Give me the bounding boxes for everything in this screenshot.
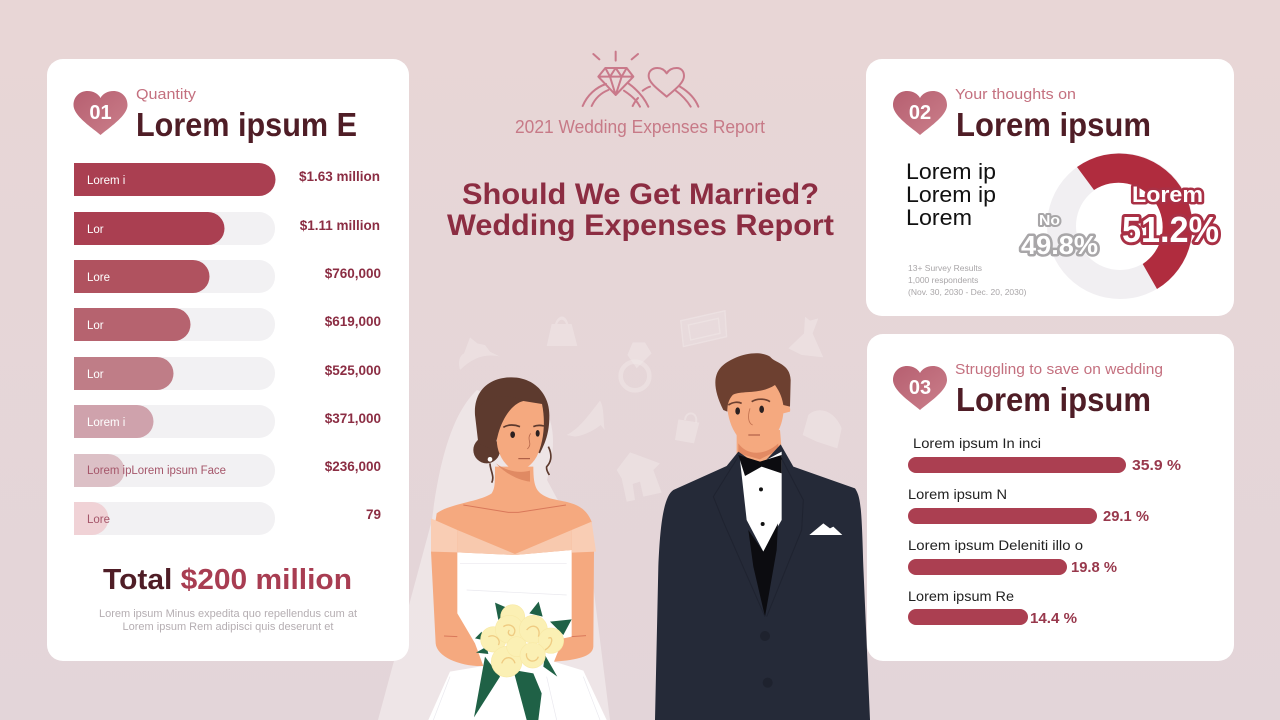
icon: heart 01 — [74, 91, 128, 135]
icon: heart 03 — [893, 366, 947, 410]
icon: dress — [788, 317, 823, 357]
survey note: 1,000 respondents — [908, 275, 978, 285]
icon: sofa — [803, 410, 842, 448]
horizontal bar chart: 14.4 % — [1030, 610, 1077, 627]
panel: your thoughts — [866, 59, 1234, 316]
groom suit — [655, 444, 870, 720]
subheading: quantity: Quantity — [136, 86, 197, 103]
bar chart: expense items: Lorem i — [87, 175, 125, 187]
bride head — [473, 377, 551, 483]
icon: high heel — [567, 401, 605, 437]
horizontal bar chart: Lorem ipsum Deleniti illo o — [908, 537, 1083, 553]
bar chart: expense items: $619,000 — [325, 314, 381, 329]
icon: handbag — [547, 317, 577, 346]
icon: heart 02 — [893, 91, 947, 135]
bride veil — [378, 390, 610, 720]
horizontal bar chart: Lorem ipsum N — [908, 486, 1007, 502]
illustration: bride — [378, 377, 610, 720]
icon: diamond ring and heart ring logo — [583, 52, 698, 107]
donut chart: 49.8% — [1021, 230, 1098, 260]
horizontal bar chart: Lorem ipsum In inci — [913, 435, 1041, 451]
footnote text: Lorem ipsum Minus expedita quo repellendus cum at — [99, 608, 357, 620]
icon: heart 03: 03 — [909, 377, 931, 399]
subheading: your thoughts on: Your thoughts on — [955, 86, 1076, 103]
donut chart: No — [1039, 212, 1060, 229]
heading: lorem ipsum: Lorem ipsum — [956, 106, 1151, 143]
footnote text — [99, 608, 357, 633]
icon: heart 01: 01 — [89, 102, 112, 124]
bar chart: expense items — [74, 163, 381, 535]
bar chart: expense items: Lore — [87, 272, 110, 284]
bar chart: expense items: Lorem i — [87, 417, 125, 429]
panel: quantity expenses — [47, 59, 409, 661]
icon: money bills — [681, 311, 727, 347]
bouquet — [474, 602, 572, 720]
survey note — [908, 263, 1027, 297]
faded wedding icons — [459, 311, 842, 502]
horizontal bar chart: 19.8 % — [1071, 559, 1117, 576]
footnote text: Lorem ipsum Rem adipisci quis deserunt et — [123, 621, 333, 633]
bar chart: expense items: Lor — [87, 320, 104, 332]
horizontal bar chart: 35.9 % — [1132, 457, 1181, 474]
title: Should We Get Married? — [462, 178, 819, 211]
bar chart: expense items: $760,000 — [325, 266, 381, 281]
bride body and dress — [428, 467, 607, 720]
bar chart: expense items: $371,000 — [325, 411, 381, 426]
donut chart — [1021, 153, 1219, 289]
bar chart: expense items: Lor — [87, 369, 104, 381]
bar chart: expense items: 79 — [366, 507, 381, 522]
horizontal bar chart — [908, 435, 1181, 627]
donut chart: Lorem — [1132, 182, 1203, 207]
icon: lock — [675, 413, 699, 443]
icon: diamond ring — [621, 342, 652, 390]
total figure: Total $200 million — [103, 564, 352, 596]
question text: Lorem ip — [906, 159, 996, 184]
icon: tiara — [459, 337, 500, 370]
horizontal bar chart: 29.1 % — [1103, 508, 1149, 525]
heading: lorem ipsum: Lorem ipsum — [956, 381, 1151, 418]
survey note: (Nov. 30, 2030 - Dec. 20, 2030) — [908, 287, 1027, 297]
report label: 2021 Wedding Expenses Report — [515, 117, 765, 137]
panel: struggling to save — [867, 334, 1234, 661]
bar chart: expense items: $1.63 million — [299, 169, 380, 184]
title — [447, 178, 834, 242]
heading: lorem ipsum e: Lorem ipsum E — [136, 106, 357, 143]
groom neck and face — [727, 377, 790, 463]
illustration: groom — [655, 353, 870, 720]
icon: house — [617, 452, 662, 502]
bar chart: expense items: $525,000 — [325, 363, 381, 378]
groom hair and features — [715, 353, 791, 435]
bar chart: expense items: Lorem ipLorem ipsum Face — [87, 465, 226, 477]
donut chart: 51.2% — [1122, 209, 1219, 250]
icon: heart 02: 02 — [909, 102, 931, 124]
bar chart: expense items: Lor — [87, 224, 104, 236]
title: Wedding Expenses Report — [447, 209, 834, 242]
survey note: 13+ Survey Results — [908, 263, 982, 273]
subheading: struggling to save: Struggling to save on wedding — [955, 361, 1163, 378]
question text: Lorem — [906, 205, 972, 230]
horizontal bar chart: Lorem ipsum Re — [908, 588, 1014, 604]
bar chart: expense items: Lore — [87, 514, 110, 526]
question text — [906, 159, 996, 230]
bar chart: expense items: $236,000 — [325, 459, 381, 474]
bar chart: expense items: $1.11 million — [300, 218, 380, 233]
question text: Lorem ip — [906, 182, 996, 207]
